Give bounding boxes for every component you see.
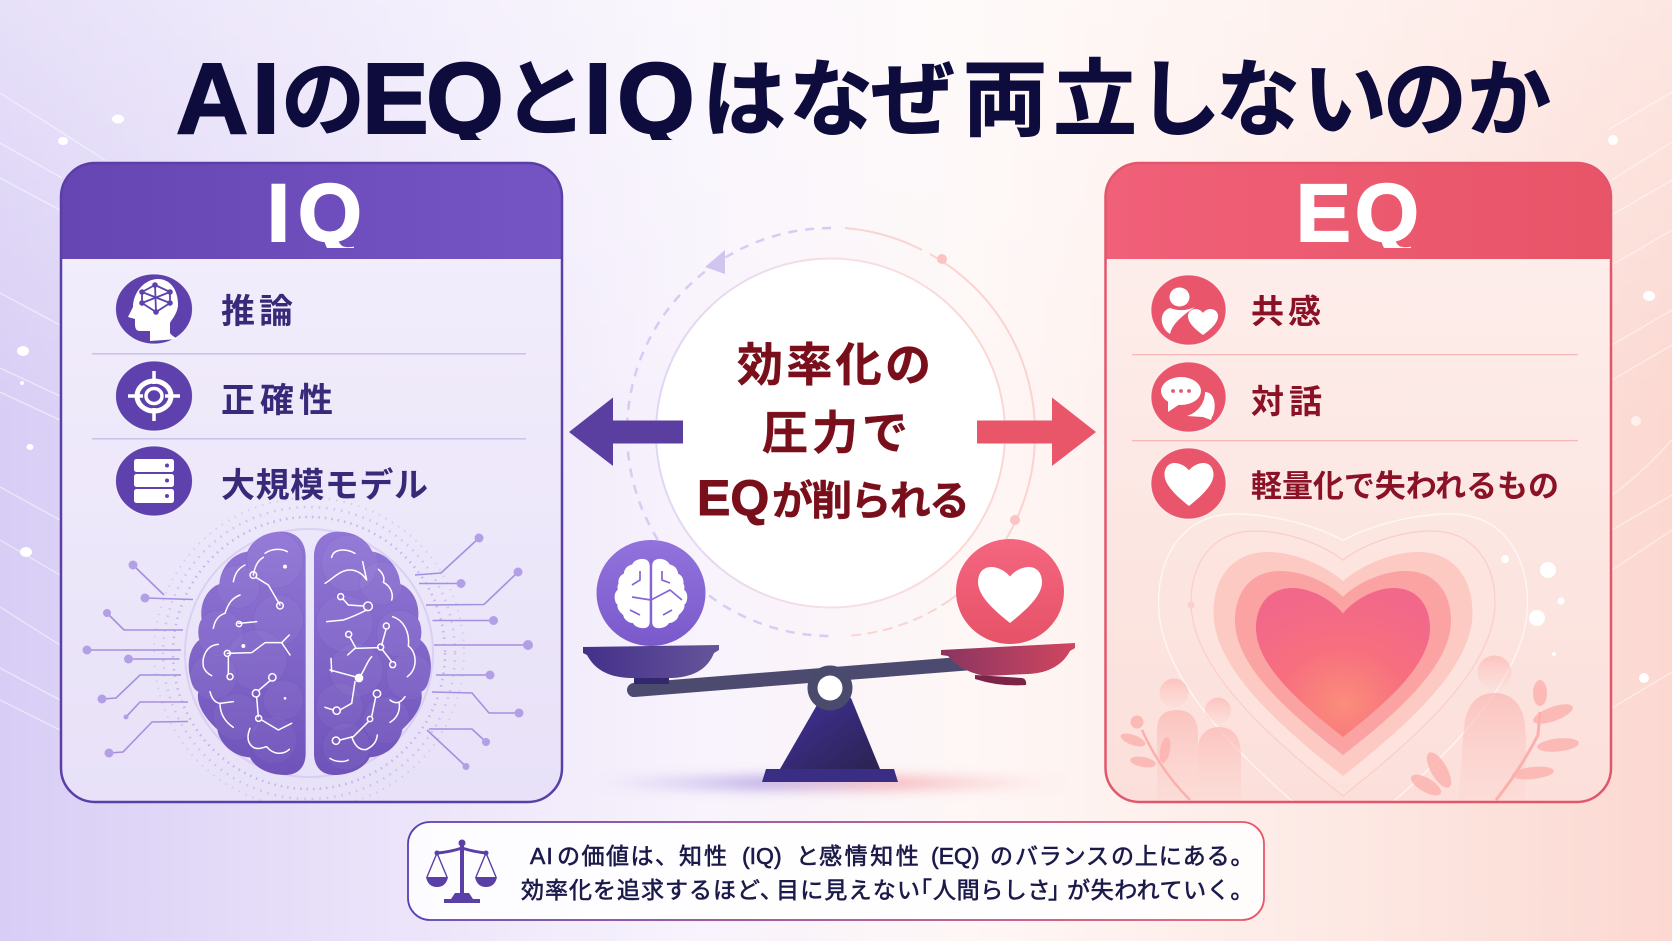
label: reasoning: 推論 — [221, 293, 293, 331]
icon: scales of justice — [426, 840, 497, 903]
center message: EQ — [697, 470, 769, 526]
icon: head network — [116, 274, 192, 344]
arrow: to EQ — [977, 398, 1096, 466]
dashed and solid cycle arcs — [627, 228, 1035, 636]
icon: brain on pan — [596, 540, 706, 646]
divider — [92, 353, 526, 355]
pivot — [808, 666, 852, 710]
icon: servers — [116, 446, 192, 516]
note text: バランス — [1015, 843, 1110, 869]
note text: AI — [530, 843, 554, 869]
note text: と — [796, 843, 819, 869]
panel: EQ — [1105, 163, 1612, 844]
note text: (IQ) — [742, 843, 782, 869]
bottom note — [408, 822, 1264, 920]
title: EQ — [362, 43, 504, 155]
icon: heart on pan — [956, 539, 1064, 644]
note text: 人間らしさ — [933, 877, 1051, 903]
title: はなぜ両立しないのか — [702, 53, 1551, 147]
icon: target — [116, 361, 192, 431]
note text: 知性 — [679, 843, 729, 869]
EQ header band — [1105, 163, 1612, 259]
left pan — [583, 645, 719, 678]
note text: の価値は、 — [557, 843, 680, 869]
title: の — [281, 53, 365, 147]
label: dialogue: 対話 — [1251, 383, 1322, 420]
label: accuracy: 正確性 — [221, 382, 333, 420]
label: empathy: 共感 — [1251, 293, 1321, 330]
note text: 目に見えない — [776, 877, 921, 903]
center message: が削られる — [772, 478, 970, 524]
scale stand — [780, 698, 880, 769]
note text: の — [990, 843, 1013, 869]
label: what is lost: 軽量化で失われるもの — [1251, 469, 1559, 504]
note text: 効率化を追求するほど、 — [521, 877, 784, 903]
panel: IQ — [61, 163, 562, 808]
beam — [634, 662, 985, 690]
icon: empathy — [1151, 275, 1226, 345]
divider — [1132, 440, 1578, 441]
IQ heading: IQ — [267, 168, 362, 259]
note text: 感情知性 — [819, 843, 921, 869]
IQ header band — [61, 163, 562, 259]
center pressure graphic — [569, 228, 1096, 636]
note text: が失われていく。 — [1067, 877, 1254, 903]
title: IQ — [584, 43, 695, 155]
title: AI — [176, 43, 280, 155]
note text: 」 — [1048, 877, 1071, 903]
center message: 圧力で — [762, 407, 908, 459]
arrow: to IQ — [569, 398, 683, 466]
divider — [1132, 354, 1578, 355]
brain circuit graphic — [82, 498, 533, 808]
center message: 効率化の — [737, 339, 931, 391]
balance scale — [583, 539, 1075, 790]
label: large model: 大規模モデル — [221, 466, 428, 505]
right pan — [941, 643, 1075, 676]
divider — [92, 438, 526, 440]
center circle — [656, 258, 1005, 608]
layered heart with people — [1120, 513, 1579, 801]
title: と — [503, 53, 587, 147]
icon: heart — [1151, 448, 1226, 519]
EQ heading: EQ — [1296, 168, 1419, 259]
note text: 「 — [909, 877, 932, 903]
note text: の上にある。 — [1111, 843, 1254, 869]
note text: (EQ) — [931, 843, 980, 869]
icon: dialogue — [1151, 362, 1226, 432]
